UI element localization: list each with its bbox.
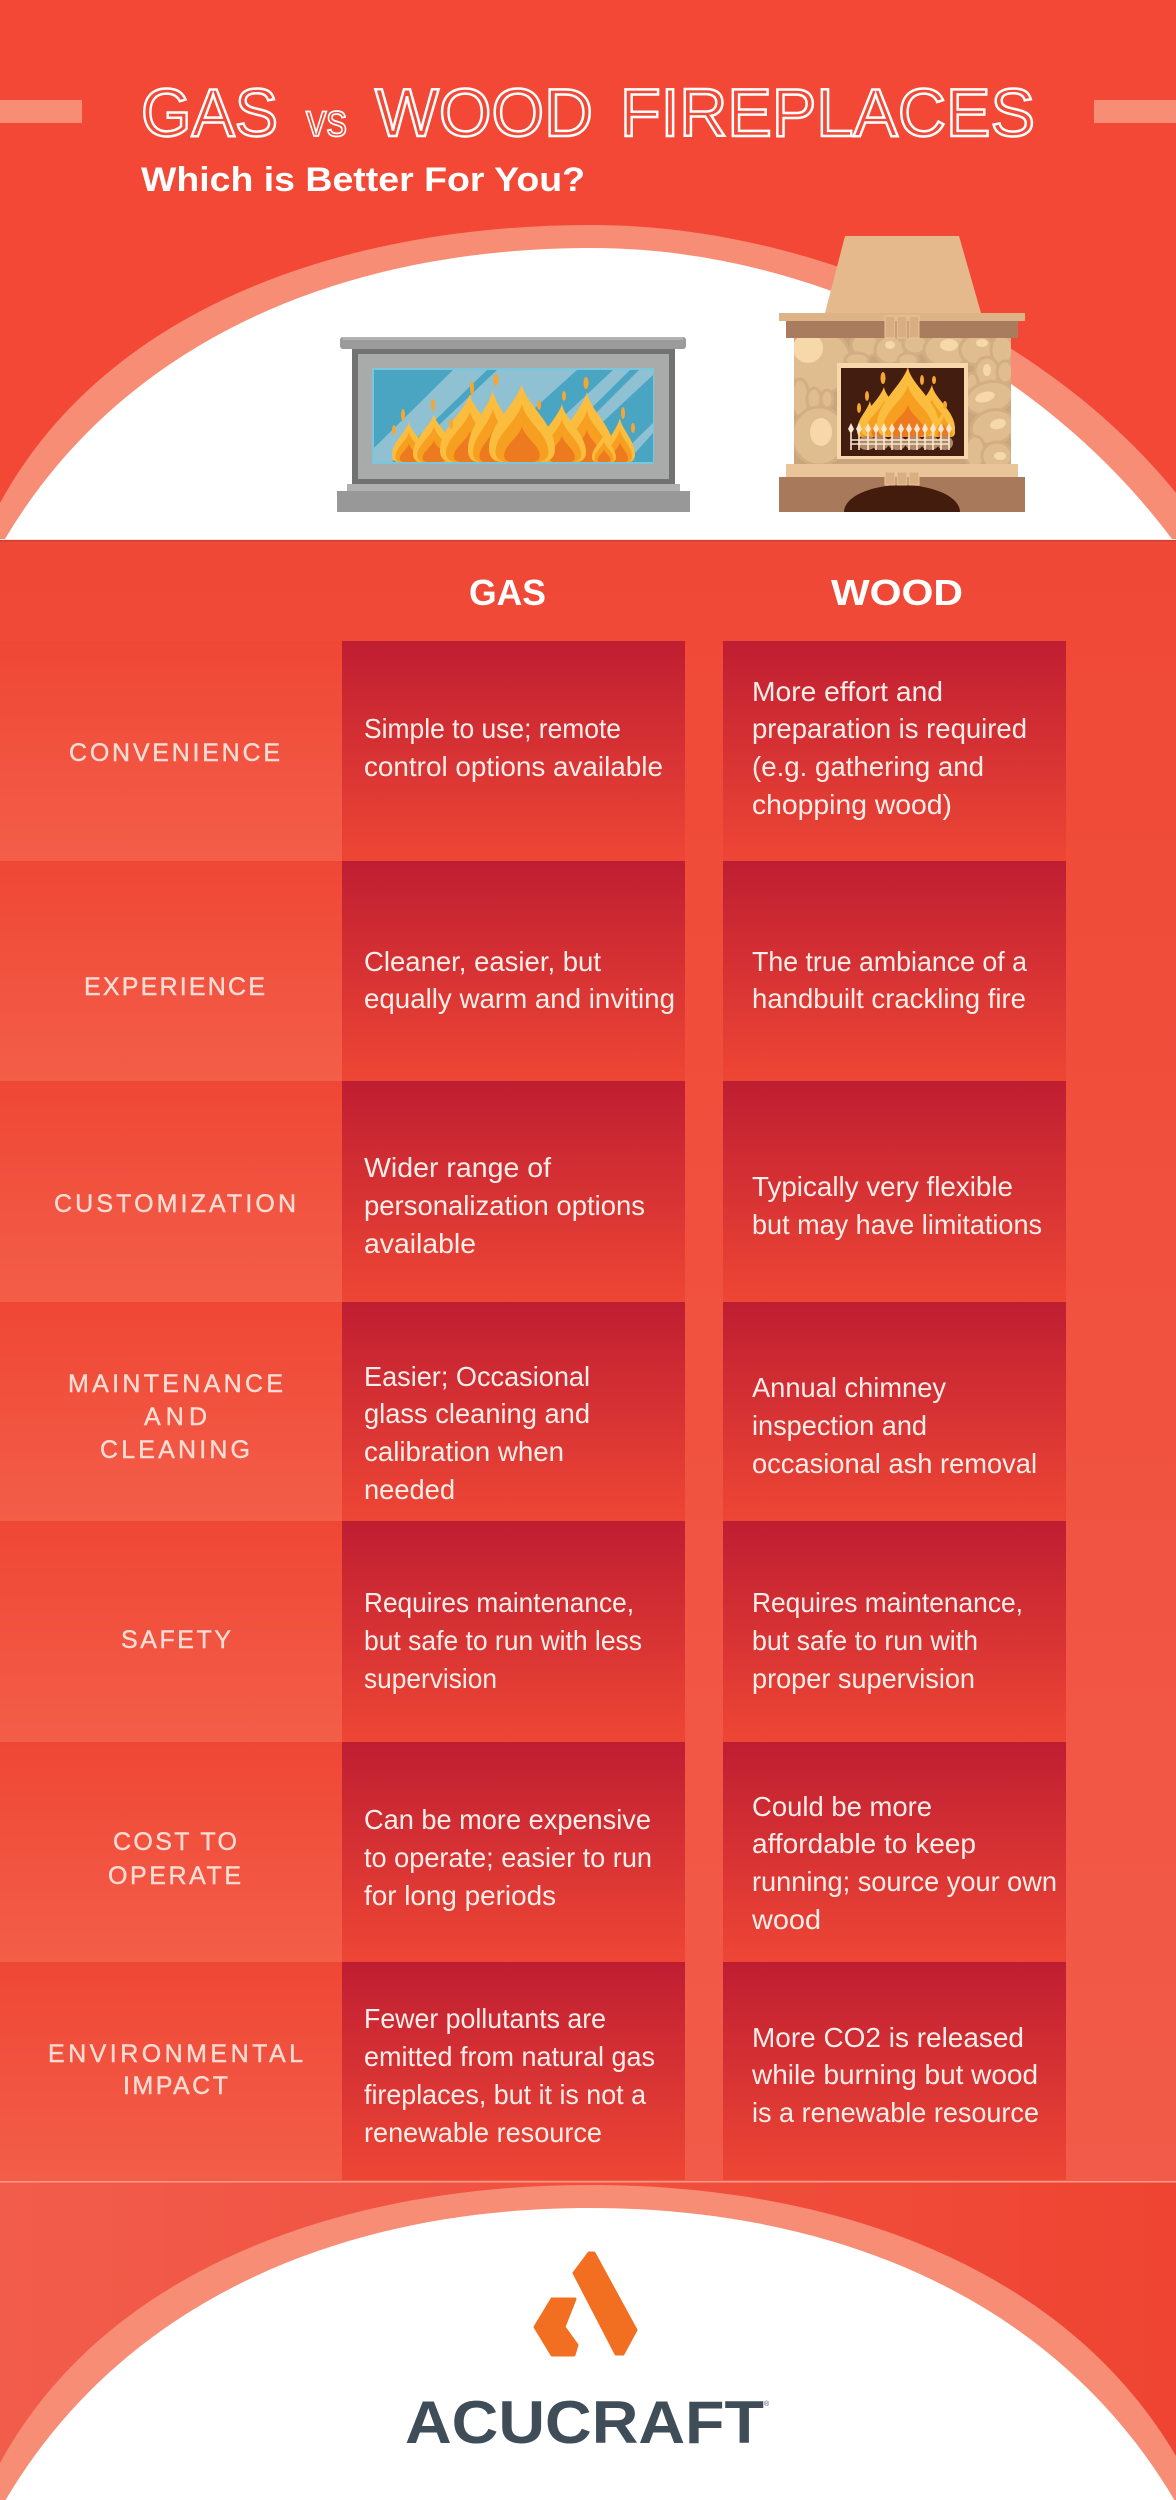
row: safety: Requires maintenance,	[752, 1587, 1023, 1618]
row: environmental impact: ENVIRONMENTAL	[48, 2040, 303, 2068]
row: environmental impact: Fewer pollutants are	[364, 2003, 606, 2034]
row: maintenance and cleaning: Easier; Occasional	[364, 1361, 590, 1392]
row: customization	[0, 1081, 1066, 1302]
row: maintenance and cleaning: MAINTENANCE	[68, 1370, 283, 1398]
row: cost to operate: wood	[751, 1904, 821, 1935]
row: environmental impact: emitted from natural gas	[364, 2041, 655, 2072]
row: environmental impact: fireplaces, but it is not a	[364, 2079, 646, 2110]
logo: Acucraft wordmark: ®	[764, 2400, 770, 2408]
row: maintenance and cleaning: needed	[364, 1474, 455, 1505]
row: cost to operate	[0, 1742, 1066, 1962]
row: experience: equally warm and inviting	[364, 983, 675, 1014]
row: maintenance and cleaning: AND	[144, 1403, 207, 1431]
row: cost to operate: OPERATE	[108, 1862, 241, 1890]
row: convenience: More effort and	[752, 676, 943, 707]
row: safety: proper supervision	[752, 1663, 975, 1694]
title: GAS	[141, 75, 278, 151]
column heading: WOOD: WOOD	[831, 572, 963, 613]
row: convenience: chopping wood)	[752, 789, 952, 820]
row: convenience: preparation is required	[752, 713, 1027, 744]
row: maintenance and cleaning: glass cleaning and	[364, 1398, 590, 1429]
title	[141, 75, 1035, 151]
row: experience	[0, 861, 1066, 1081]
row: maintenance and cleaning: Annual chimney	[752, 1372, 946, 1403]
wood flames	[857, 367, 955, 437]
row: environmental impact: while burning but wood	[751, 2059, 1038, 2090]
logs and fence	[848, 423, 953, 450]
row: cost to operate: affordable to keep	[752, 1828, 976, 1859]
side accent bars	[0, 100, 1176, 123]
mantel brackets	[885, 316, 919, 485]
icon: wood fireplace	[779, 236, 1025, 512]
row: environmental impact: renewable resource	[364, 2117, 602, 2148]
row: cost to operate: COST TO	[113, 1828, 237, 1856]
row: maintenance and cleaning: occasional ash removal	[752, 1448, 1037, 1479]
title: vs	[306, 94, 347, 146]
row: environmental impact	[0, 1962, 1066, 2180]
row: convenience: (e.g. gathering and	[752, 751, 984, 782]
row: convenience: control options available	[364, 751, 663, 782]
footer background	[0, 2182, 1176, 2500]
row: safety: but safe to run with less	[364, 1625, 642, 1656]
logo: Acucraft wordmark: ACUCRAFT	[405, 2389, 764, 2456]
row: experience: The true ambiance of a	[752, 946, 1027, 977]
row: cost to operate: running; source your own	[752, 1866, 1057, 1897]
row: cost to operate: for long periods	[364, 1880, 556, 1911]
title: WOOD	[375, 75, 593, 151]
row: customization: personalization options	[364, 1190, 645, 1221]
gas flames	[392, 374, 635, 462]
logo: Acucraft mark	[535, 2253, 636, 2355]
row: maintenance and cleaning: calibration when	[364, 1436, 564, 1467]
title: FIREPLACES	[620, 75, 1035, 151]
table background	[0, 541, 1176, 2182]
row: customization: Wider range of	[364, 1152, 551, 1183]
row: convenience: Simple to use; remote	[364, 713, 621, 744]
stone wall	[794, 338, 1011, 464]
row: convenience	[0, 641, 1066, 861]
row: safety: supervision	[364, 1663, 497, 1694]
row: customization: but may have limitations	[752, 1209, 1042, 1240]
row: customization: available	[364, 1228, 476, 1259]
decorative arch: footer	[0, 2185, 1176, 2500]
header background	[0, 0, 1176, 540]
row: cost to operate: to operate; easier to run	[364, 1842, 652, 1873]
decorative arch: header	[0, 225, 1176, 540]
row: safety: SAFETY	[121, 1626, 231, 1654]
row: experience: Cleaner, easier, but	[364, 946, 601, 977]
row: environmental impact: is a renewable resource	[752, 2097, 1039, 2128]
row: maintenance and cleaning: CLEANING	[100, 1436, 250, 1464]
row: maintenance and cleaning	[0, 1302, 1066, 1521]
row: cost to operate: Could be more	[752, 1791, 932, 1822]
row: customization: Typically very flexible	[752, 1171, 1013, 1202]
row: experience: handbuilt crackling fire	[752, 983, 1026, 1014]
column heading: GAS: GAS	[469, 572, 546, 613]
row: safety: Requires maintenance,	[364, 1587, 634, 1618]
subtitle: Which is Better For You?	[141, 161, 585, 199]
icon: gas fireplace	[337, 337, 690, 512]
row: safety: but safe to run with	[752, 1625, 978, 1656]
row: maintenance and cleaning: inspection and	[752, 1410, 927, 1441]
row: experience: EXPERIENCE	[84, 973, 265, 1001]
row: convenience: CONVENIENCE	[69, 739, 280, 767]
row: cost to operate: Can be more expensive	[364, 1804, 651, 1835]
row: customization: CUSTOMIZATION	[54, 1190, 296, 1218]
row: safety	[0, 1521, 1066, 1742]
row: environmental impact: IMPACT	[123, 2072, 228, 2100]
row: environmental impact: More CO2 is released	[752, 2022, 1024, 2053]
